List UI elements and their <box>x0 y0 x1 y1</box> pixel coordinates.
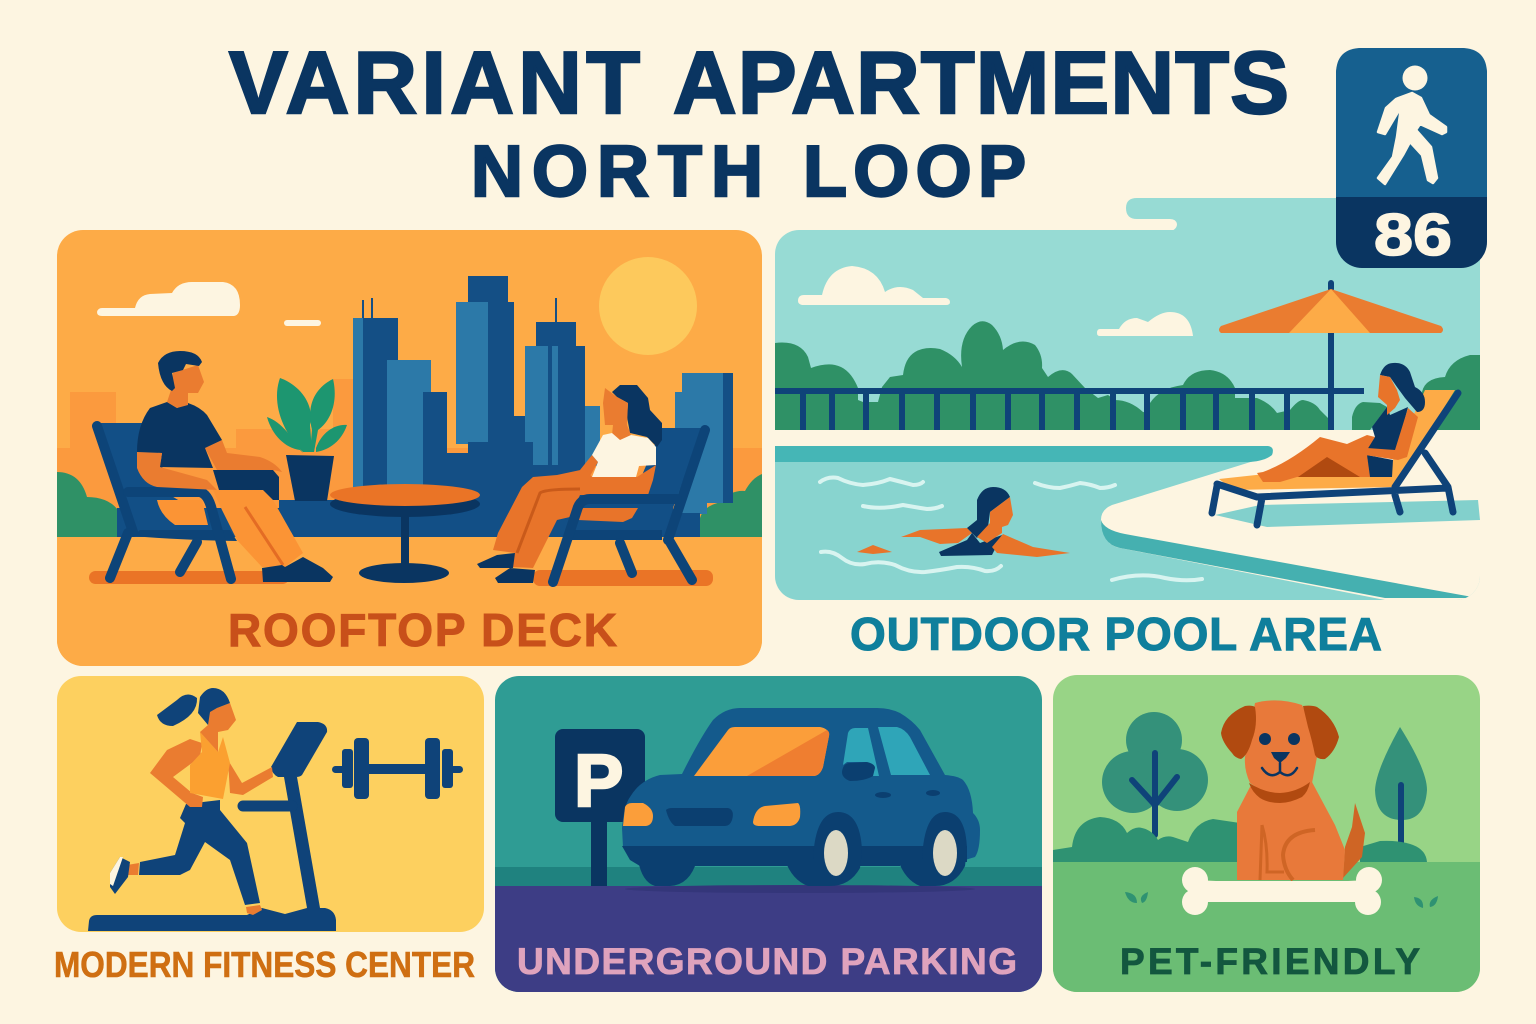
icon: dog <box>1221 700 1365 880</box>
legs <box>139 800 260 905</box>
arms <box>150 739 203 807</box>
title: LOOP <box>803 132 1026 212</box>
face <box>200 703 236 752</box>
panel: modern fitness center <box>54 676 484 985</box>
clouds <box>97 282 240 316</box>
walk score number: 86 <box>1374 202 1452 268</box>
back arm <box>580 455 598 476</box>
title: NORTH <box>471 132 763 212</box>
railing <box>775 388 1364 430</box>
label: pet-friendly: PET-FRIENDLY <box>1120 941 1420 982</box>
title: APARTMENTS <box>673 33 1289 132</box>
grass sprigs <box>1125 892 1438 908</box>
cloud small <box>1097 312 1193 336</box>
panel: pet-friendly <box>1053 675 1480 992</box>
frame <box>1212 393 1458 525</box>
plant <box>267 378 347 501</box>
trousers <box>493 465 656 568</box>
label: underground parking: UNDERGROUND PARKING <box>517 941 1017 982</box>
chair panel <box>557 428 702 535</box>
arm <box>1365 408 1418 460</box>
title <box>229 33 1289 212</box>
lounger shadow <box>1215 500 1480 527</box>
hair <box>612 385 662 447</box>
panel: rooftop deck <box>57 230 762 667</box>
skyline <box>353 276 733 536</box>
umbrella <box>1219 280 1443 430</box>
hair <box>198 688 230 725</box>
label: outdoor pool area: OUTDOOR POOL AREA <box>850 608 1382 660</box>
treadmill <box>88 722 336 931</box>
forearm <box>205 440 282 472</box>
swimsuit <box>1367 407 1408 450</box>
bench wall <box>117 500 700 537</box>
chair frame <box>553 499 692 582</box>
person right with chair <box>477 385 705 583</box>
bushes <box>57 472 762 537</box>
panel: underground parking <box>495 676 1042 992</box>
runner <box>110 688 273 915</box>
shirt <box>137 402 222 468</box>
title: VARIANT <box>229 33 640 132</box>
cloud left <box>798 266 950 305</box>
label: modern fitness center: MODERN FITNESS CENTER <box>54 944 475 985</box>
floor <box>57 537 762 667</box>
walk score badge <box>1336 48 1487 268</box>
icon: dumbbell <box>332 738 463 799</box>
icon: parking sign <box>555 729 645 886</box>
distant buildings <box>57 379 762 518</box>
lounger with sunbather <box>1212 363 1458 525</box>
trees <box>775 321 1158 430</box>
table <box>330 484 480 583</box>
face <box>1378 375 1400 415</box>
top <box>190 732 230 799</box>
face <box>603 388 631 441</box>
near arm <box>137 452 217 490</box>
hair <box>1380 363 1425 412</box>
neck and face <box>167 365 204 408</box>
icon: walking person <box>1378 66 1446 184</box>
chair frame <box>133 530 237 541</box>
torso arm rest <box>213 470 279 500</box>
legs <box>1257 435 1375 482</box>
icon: bone <box>1182 867 1382 915</box>
panel: outdoor pool area <box>775 230 1480 660</box>
sun <box>599 257 697 355</box>
trees <box>1126 712 1182 758</box>
swimmer <box>857 487 1070 557</box>
car <box>622 708 980 893</box>
deck and pool <box>775 430 1480 600</box>
hair <box>158 351 202 391</box>
cloud top right <box>1126 198 1350 232</box>
chair back <box>100 423 235 535</box>
person left with chair <box>97 351 333 582</box>
shoes <box>477 553 535 583</box>
ponytail <box>157 694 197 726</box>
water ripples <box>820 478 1202 580</box>
shirt <box>592 433 656 477</box>
label: rooftop deck: ROOFTOP DECK <box>228 604 617 656</box>
icon: parking sign: P <box>574 739 623 822</box>
trousers <box>213 490 303 567</box>
